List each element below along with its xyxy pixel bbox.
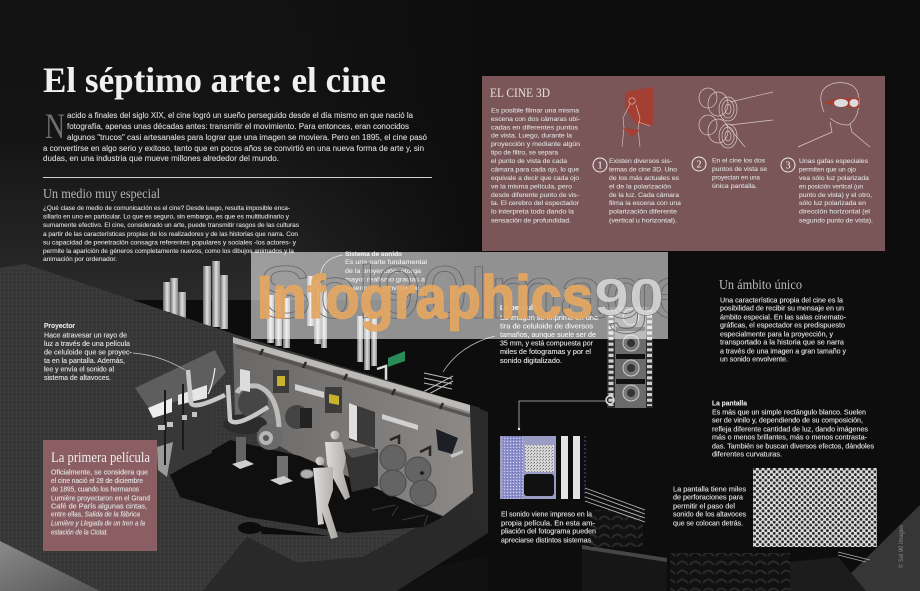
step 1: Existen diversos sis- — [609, 158, 672, 165]
step 1: de la luz. Cada cámara — [609, 192, 679, 199]
label: La pantalla: refleja diferente cantidad de luz, dando imágenes — [712, 424, 868, 434]
label: La pantalla: La pantalla — [712, 398, 748, 408]
step 2: puntos de vista se — [712, 166, 767, 173]
step 2: proyectan en una — [712, 174, 760, 182]
section: Un medio muy especial: a partir de las características propias de los realizadores y de las historias que narra. Con — [43, 231, 298, 238]
intro text: a convertirse en algo serio y exitoso, tanto que en pocos años se convirtió en una nueva forma de arte y, sin — [43, 143, 424, 153]
intro column: sensación de profundidad. — [491, 218, 571, 224]
label: Sistema de sonido: de la proyección, otorga — [345, 268, 421, 275]
watermark — [251, 252, 668, 339]
watermark number: 90 — [594, 269, 664, 327]
caption: perforated screen — [673, 484, 746, 528]
step 3: permiten que un ojo — [799, 166, 856, 174]
step 3: segundo punto de vista). — [799, 218, 873, 224]
intro text: dudas, en una industria que mueve millones alrededor del mundo. — [43, 153, 279, 163]
step 3: dirección horizontal (el — [799, 208, 870, 216]
caption: perforated screen: La pantalla tiene miles — [673, 484, 746, 494]
label: La pantalla: ser de vinilo y, dependiendo de su composición, — [712, 416, 863, 424]
intro column: proyección y mediante algún — [491, 141, 580, 148]
step 3: 3 — [786, 160, 790, 172]
intro column: tipo de filtro, se separa — [491, 150, 558, 156]
heading: El cine 3D: EL CINE 3D — [490, 85, 550, 100]
perforated screen sample — [753, 468, 877, 547]
step 3: sólo luz polarizada en — [799, 200, 866, 207]
section: Un medio muy especial: sumamente efectivo. El cine, considerado un arte, puede transmitir rasgos de las culturas — [43, 222, 300, 229]
icon: camera operator — [622, 87, 653, 147]
section: Un ámbito único: Una característica propia del cine es la — [720, 296, 843, 304]
label: La película — [500, 303, 598, 365]
step 1: filma la escena con una — [609, 200, 681, 207]
section: Un ámbito único: Un ámbito único — [719, 278, 802, 293]
arrow from film strip to sound frame — [518, 401, 605, 430]
step 1: 1 — [598, 160, 602, 172]
caption: sound on film — [501, 510, 596, 544]
label: Proyector: Hace atravesar un rayo de — [44, 330, 127, 340]
intro column: lo interpreta todo dando la — [491, 208, 574, 216]
label: Proyector — [44, 321, 133, 382]
section: Un ámbito único: ámbito especial. En las salas cinemato- — [720, 312, 847, 322]
step 1: polarización diferente — [609, 208, 677, 216]
credit: © Sol 90 Images — [898, 525, 905, 568]
step 3 — [781, 158, 873, 224]
intro text — [43, 106, 427, 163]
label: La película: 35 mm, y está compuesta por — [500, 338, 594, 348]
panel: La primera película: Lumière proyectaron en el Grand — [51, 494, 150, 502]
step 2 — [692, 157, 767, 190]
title: El séptimo arte: el cine — [43, 60, 386, 100]
intro column — [491, 108, 580, 224]
label: Proyector: luz a través de una película — [44, 339, 130, 348]
step 3: Unas gafas especiales — [799, 158, 869, 165]
label: La pantalla: Es más que un simple rectángulo blanco. Suelen — [712, 408, 866, 416]
section: Un ámbito único: un sonido envolvente. — [720, 354, 788, 364]
label: Sistema de sonido — [345, 251, 428, 292]
step 2: única pantalla. — [712, 183, 757, 190]
label: La película: sonido digitalizado. — [500, 356, 562, 365]
icon: viewer with polarized glasses — [798, 83, 870, 147]
section: Un medio muy especial: ¿Qué clase de medio de comunicación es el cine? Desde luego, resulta imposible enca- — [43, 205, 290, 212]
section: Un medio muy especial: su capacidad de penetración consagra referentes populares y sociales -los actores- y — [43, 240, 297, 246]
section: Un ámbito único: a través de una imagen a gran tamaño y — [720, 346, 846, 356]
section: Un ámbito único — [719, 278, 847, 364]
wall panels — [240, 369, 463, 458]
intro text: fotografía, apenas unas décadas antes: transmitir el movimiento. Para entonces, eran conocidos — [67, 121, 409, 131]
step 2: 2 — [696, 160, 702, 170]
intro column: cadas en diferentes puntos — [491, 124, 579, 132]
step 3: en posición vertical (un — [799, 184, 863, 190]
label: Proyector: ta en la pantalla. Además, — [44, 356, 125, 365]
section: Un ámbito único: especialmente para la proyección, y — [720, 330, 833, 338]
intro column: desde diferente punto de vis- — [491, 192, 579, 199]
auditorium floor and seats — [480, 423, 920, 591]
label: La película: miles de fotogramas y por el — [500, 347, 591, 356]
label: Sistema de sonido: Sistema de sonido — [345, 251, 402, 258]
label: La película: La película — [500, 303, 538, 312]
label: Proyector: sistema de altavoces. — [44, 373, 111, 382]
icon: film reels — [699, 88, 773, 148]
panel: La primera película: estación de la Ciotat. — [51, 528, 108, 536]
sound frame enlargement — [500, 436, 585, 499]
section: Un medio muy especial: animación por ordenador. — [43, 256, 117, 263]
panel: La primera película: Oficialmente, se considera que — [51, 468, 148, 476]
step 1: (vertical u horizontal). — [609, 218, 677, 224]
section: Un ámbito único: gráficas, el espectador es predispuesto — [720, 320, 845, 330]
section: Un ámbito único: posibilidad de recibir su mensaje en un — [720, 304, 844, 312]
caption: sound on film: apreciarse distintos sistemas. — [501, 536, 593, 544]
caption: sound on film: pliación del fotograma pueden — [501, 526, 596, 536]
intro text: acido a finales del siglo XIX, el cine logró un sueño perseguido desde el día mismo en que nació la — [67, 110, 413, 120]
film strip — [606, 307, 653, 408]
panel: La primera película — [43, 440, 157, 551]
label: La película: tira de celuloide de diversos — [500, 322, 593, 330]
caption: perforated screen: sonido de los altavoces — [673, 510, 746, 518]
projector console — [135, 350, 226, 477]
intro column: ta. El cerebro del espectador — [491, 200, 580, 207]
label: Sistema de sonido: la sensación envolvente. — [345, 285, 421, 292]
caption: sound on film: propia película. En esta am- — [501, 518, 596, 528]
label: La pantalla: más o menos brillantes, más o menos contrasta- — [712, 432, 868, 442]
projector machines — [188, 368, 312, 485]
caption: sound on film: El sonido viene impreso en la — [501, 510, 592, 518]
label: Sistema de sonido: mayor realismo gracias a — [345, 276, 425, 284]
caption: perforated screen: permitir el paso del — [673, 502, 735, 510]
operator at console — [325, 431, 378, 500]
section: Un ámbito único: transportado a la historia que se narra — [720, 338, 844, 346]
panel: La primera película: Lumière y Llegada de un tren a la — [51, 518, 145, 528]
label: Proyector: Proyector — [44, 321, 75, 330]
watermark orange text: Infographics — [257, 264, 593, 331]
panel: El cine 3D — [482, 76, 885, 251]
intro text: algunos "trucos" casi artesanales para lograr que una imagen se moviera. Pero en 1895, el cine pasó — [67, 132, 427, 142]
label: La pantalla — [712, 398, 874, 458]
intro column: equivale a decir que cada ojo — [491, 175, 579, 182]
watermark outline text: Sol90Images — [257, 251, 737, 334]
step 3: punto de vista) y el otro, — [799, 192, 872, 199]
section: Un medio muy especial: permite la aparición de géneros completamente nuevos, como los dibujos animados y la — [43, 248, 294, 255]
leader lines — [133, 255, 495, 372]
label: Proyector: de celuloide que se proyec- — [44, 348, 133, 356]
step 3: vea sólo luz polarizada — [799, 175, 869, 182]
step 1: temas de cine 3D. Uno — [609, 166, 677, 174]
intro text: N — [45, 106, 65, 146]
step 2: En el cine los dos — [712, 158, 766, 164]
label: La pantalla: diferentes curvaturas. — [712, 450, 782, 458]
intro column: ve la misma película, pero — [491, 184, 572, 190]
caption: perforated screen: que se colocan detrás. — [673, 518, 743, 528]
projection room — [0, 264, 488, 591]
caption: perforated screen: de perforaciones para — [673, 492, 743, 502]
intro column: Es posible filmar una misma — [491, 108, 579, 114]
step 1: el de la polarización — [609, 184, 671, 190]
panel: La primera película: de 1895, cuando los hermanos — [51, 484, 139, 494]
intro column: de vista. Luego, durante la — [491, 132, 572, 140]
step 1 — [593, 158, 681, 224]
intro column: el punto de vista de cada — [491, 158, 567, 165]
step 1: de los más actuales es — [609, 175, 680, 182]
label: La película: tamaños, aunque suele ser de — [500, 330, 596, 339]
section: Un medio muy especial: Un medio muy especial — [43, 187, 160, 202]
intro column: cámara para cada ojo, lo que — [491, 166, 579, 174]
panel: La primera película: entre ellas, Salida de la fábrica — [51, 510, 140, 518]
panel: La primera película: La primera película — [51, 450, 150, 466]
speakers behind the screen — [163, 261, 453, 395]
panel: La primera película: Café de París algunas cintas, — [51, 502, 147, 510]
label: Sistema de sonido: Es una parte fundamental — [345, 259, 428, 266]
panel: La primera película: el cine nació el 28 de diciembre — [51, 476, 143, 485]
operator with reel — [238, 457, 338, 539]
film reels — [372, 436, 436, 526]
label: La película: La imagen se imprime en una — [500, 313, 598, 322]
section: Un medio muy especial — [43, 187, 300, 263]
intro column: escena con dos cámaras ubi- — [491, 116, 580, 123]
label: Proyector: lee y envía el sonido al — [44, 364, 114, 374]
section: Un medio muy especial: sillarlo en uno en particular. Lo que es seguro, sin embargo, es que es multitudinario y — [43, 214, 290, 220]
label: La pantalla: das. También se buscan diversos efectos, dándoles — [712, 442, 874, 450]
